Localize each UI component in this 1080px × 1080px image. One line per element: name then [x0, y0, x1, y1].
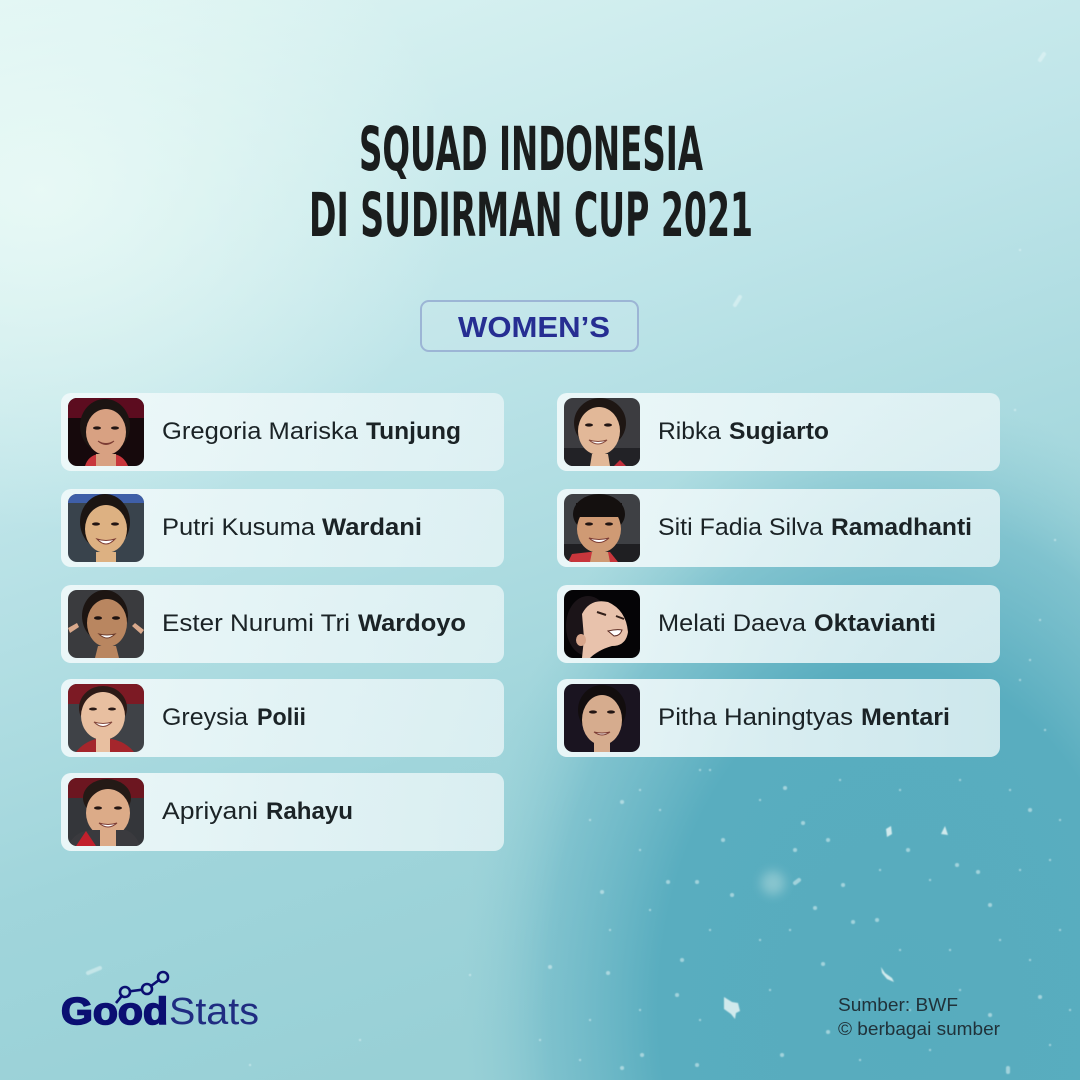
category badge: women's [421, 301, 638, 351]
player card: Siti Fadia Silva Ramadhanti: Siti Fadia Silva [658, 514, 823, 541]
player card: Melati Daeva Oktavianti: Oktavianti [814, 610, 936, 637]
player card: Melati Daeva Oktavianti: Melati Daeva [658, 610, 806, 637]
player card: Apriyani Rahayu [61, 773, 504, 851]
player card: Greysia Polii: Greysia [162, 704, 248, 731]
player card: Melati Daeva Oktavianti [557, 585, 1000, 663]
category badge: women's: WOMEN’S [458, 312, 610, 344]
source note [838, 995, 1000, 1039]
player card: Ester Nurumi Tri Wardoyo: Ester Nurumi Tri [162, 610, 350, 637]
player card: Siti Fadia Silva Ramadhanti: Ramadhanti [831, 514, 972, 541]
title: SQUAD INDONESIA [359, 114, 703, 185]
player card: Pitha Haningtyas Mentari: Pitha Haningtyas [658, 704, 853, 731]
player card: Pitha Haningtyas Mentari [557, 679, 1000, 757]
player card: Ester Nurumi Tri Wardoyo: Wardoyo [358, 610, 466, 637]
player card: Pitha Haningtyas Mentari: Mentari [861, 704, 950, 731]
logo: GoodStats: Stats [169, 991, 259, 1033]
player card: Gregoria Mariska Tunjung [61, 393, 504, 471]
player card: Greysia Polii: Polii [257, 704, 306, 731]
player card: Ester Nurumi Tri Wardoyo [61, 585, 504, 663]
logo: GoodStats [61, 972, 259, 1033]
player card: Greysia Polii [61, 679, 504, 757]
title [309, 114, 753, 251]
player card: Gregoria Mariska Tunjung: Gregoria Mariska [162, 418, 358, 445]
source note: Sumber: BWF [838, 995, 958, 1015]
player card: Gregoria Mariska Tunjung: Tunjung [366, 418, 461, 445]
logo: GoodStats: Good [61, 991, 168, 1033]
player card: Ribka Sugiarto: Sugiarto [729, 418, 829, 445]
source note: © berbagai sumber [838, 1019, 1000, 1039]
player card: Ribka Sugiarto [557, 393, 1000, 471]
player card: Apriyani Rahayu: Apriyani [162, 798, 258, 825]
player card: Putri Kusuma Wardani [61, 489, 504, 567]
player card: Ribka Sugiarto: Ribka [658, 418, 721, 445]
player card: Apriyani Rahayu: Rahayu [266, 798, 353, 825]
player card: Putri Kusuma Wardani: Putri Kusuma [162, 514, 315, 541]
player card: Putri Kusuma Wardani: Wardani [322, 514, 422, 541]
player card: Siti Fadia Silva Ramadhanti [557, 489, 1000, 567]
